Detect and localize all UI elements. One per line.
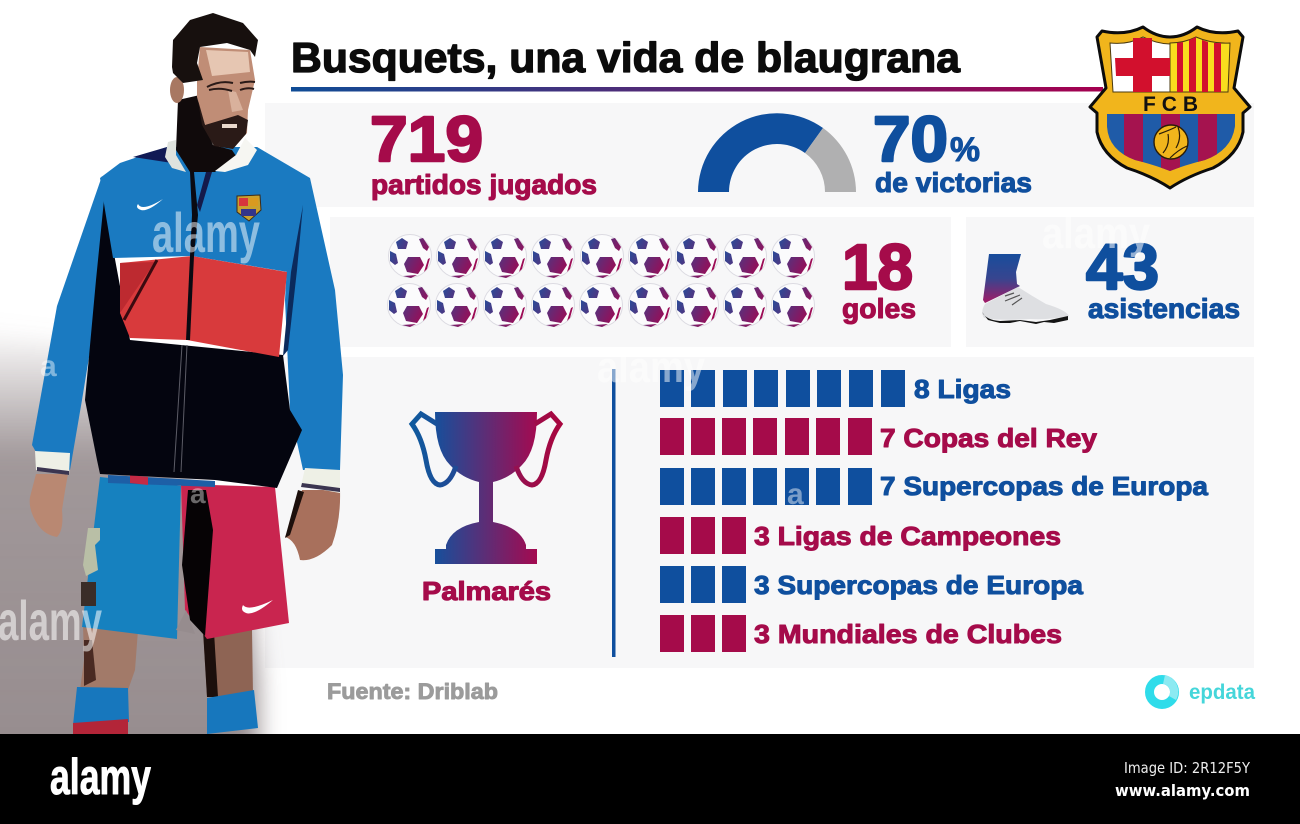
right sleeve	[257, 147, 343, 470]
hair	[172, 13, 258, 83]
legs	[80, 625, 138, 690]
logo: epdata: epdata	[1189, 681, 1255, 704]
footer bar	[0, 734, 1300, 824]
icon: FC Barcelona crest	[1090, 27, 1250, 188]
bar row: 3 Ligas de Campeones	[660, 517, 1061, 554]
panel: asistencias	[966, 217, 1254, 347]
logo: epdata	[1150, 675, 1255, 704]
watermarks: alamy	[152, 201, 260, 264]
watermarks: a	[190, 478, 206, 509]
crest: blaugrana stripes	[1107, 114, 1235, 174]
jacket red panel	[120, 256, 287, 357]
bar row: 3 Mundiales de Clubes	[660, 615, 1062, 652]
divider	[612, 369, 616, 657]
bar row: 7 Copas del Rey	[660, 418, 1098, 455]
cuffs	[35, 451, 70, 475]
shorts shadow	[182, 490, 213, 636]
shorts blue half	[82, 477, 181, 639]
bar row: 3 Supercopas de Europa: 3 Supercopas de Europa	[754, 570, 1084, 600]
watermarks	[0, 201, 1150, 652]
stat: 719 partidos jugados: 719	[370, 103, 483, 175]
stat: 43 asistencias: 43	[1086, 231, 1159, 303]
watermarks: a	[40, 350, 57, 383]
heading: Palmarés: Palmarés	[422, 576, 551, 606]
stat: 43 asistencias: asistencias	[1088, 293, 1240, 324]
icon: footballs row 1	[388, 234, 814, 278]
stat: 18 goles: goles	[842, 293, 916, 324]
player photo illustration	[30, 13, 343, 734]
eyes and brows	[207, 82, 255, 91]
face	[197, 47, 255, 136]
mouth	[222, 124, 237, 128]
beard	[198, 100, 248, 149]
left sleeve	[32, 176, 112, 470]
jacket chest blue	[100, 147, 300, 272]
title: Busquets, una vida de blaugrana	[291, 34, 961, 81]
zipper	[186, 172, 212, 340]
shorts waistband	[108, 475, 215, 487]
jacket lower black	[85, 200, 302, 488]
crest: FCB letters: FCB	[1143, 93, 1198, 116]
logo: alamy: alamy	[50, 749, 151, 805]
nose shadow	[228, 90, 243, 112]
shorts red half	[181, 484, 289, 639]
crest: cross of Saint George	[1110, 37, 1170, 92]
panel: goles	[330, 217, 951, 347]
bar row: 7 Supercopas de Europa	[660, 468, 1209, 505]
image id: Image ID: 2R12F5Y	[1124, 759, 1251, 777]
sleeve shadow line	[283, 205, 303, 356]
crest: senyera stripes	[1170, 37, 1230, 92]
player shadow	[0, 325, 258, 770]
bar row: 7 Supercopas de Europa: 7 Supercopas de Europa	[880, 471, 1209, 501]
watermarks: alamy	[1042, 209, 1150, 258]
stat: 70% de victorias: 70	[873, 103, 948, 175]
jacket crest	[237, 195, 261, 221]
stat: 18 goles: 18	[842, 231, 913, 303]
stat: 719 partidos jugados	[370, 103, 597, 200]
panel: palmarés	[265, 357, 1254, 668]
shorts number	[83, 528, 100, 576]
stat: 719 partidos jugados: partidos jugados	[371, 169, 597, 200]
ear	[170, 77, 184, 103]
panel: partidos y victorias	[265, 103, 1254, 207]
bar row: 8 Ligas: 8 Ligas	[914, 374, 1011, 404]
bar row: 3 Supercopas de Europa	[660, 566, 1084, 603]
icon: trophy	[412, 412, 560, 564]
stat: 70% de victorias: %	[950, 131, 980, 169]
forehead highlight	[206, 50, 250, 76]
stat: 70% de victorias: de victorias	[875, 167, 1032, 198]
stat: 43 asistencias	[1086, 231, 1240, 324]
neck dark	[176, 95, 236, 172]
jacket dark shoulder	[133, 147, 168, 162]
title underline	[291, 87, 1103, 92]
collar right	[215, 138, 257, 172]
hands	[30, 474, 68, 537]
website: www.alamy.com	[1115, 781, 1250, 800]
bar row: 8 Ligas	[660, 370, 1011, 407]
swoosh: shorts	[242, 600, 273, 613]
icon: boot and sock	[982, 254, 1069, 324]
collar left	[165, 140, 186, 172]
bar row: 7 Copas del Rey: 7 Copas del Rey	[880, 423, 1098, 453]
bar row: 3 Mundiales de Clubes: 3 Mundiales de Clubes	[754, 619, 1062, 649]
crest: ball	[1154, 125, 1188, 159]
source note: Fuente: Driblab	[327, 679, 498, 704]
socks	[73, 687, 129, 725]
chart: 70% gauge	[698, 113, 856, 192]
icon: footballs row 2	[388, 284, 814, 327]
swoosh: jacket	[137, 199, 163, 210]
watermarks: alamy	[597, 343, 705, 392]
watermarks: a	[787, 478, 804, 511]
watermarks: alamy	[0, 589, 102, 652]
stat: 70% de victorias	[873, 103, 1032, 198]
bar row: 3 Ligas de Campeones: 3 Ligas de Campeones	[754, 521, 1061, 551]
